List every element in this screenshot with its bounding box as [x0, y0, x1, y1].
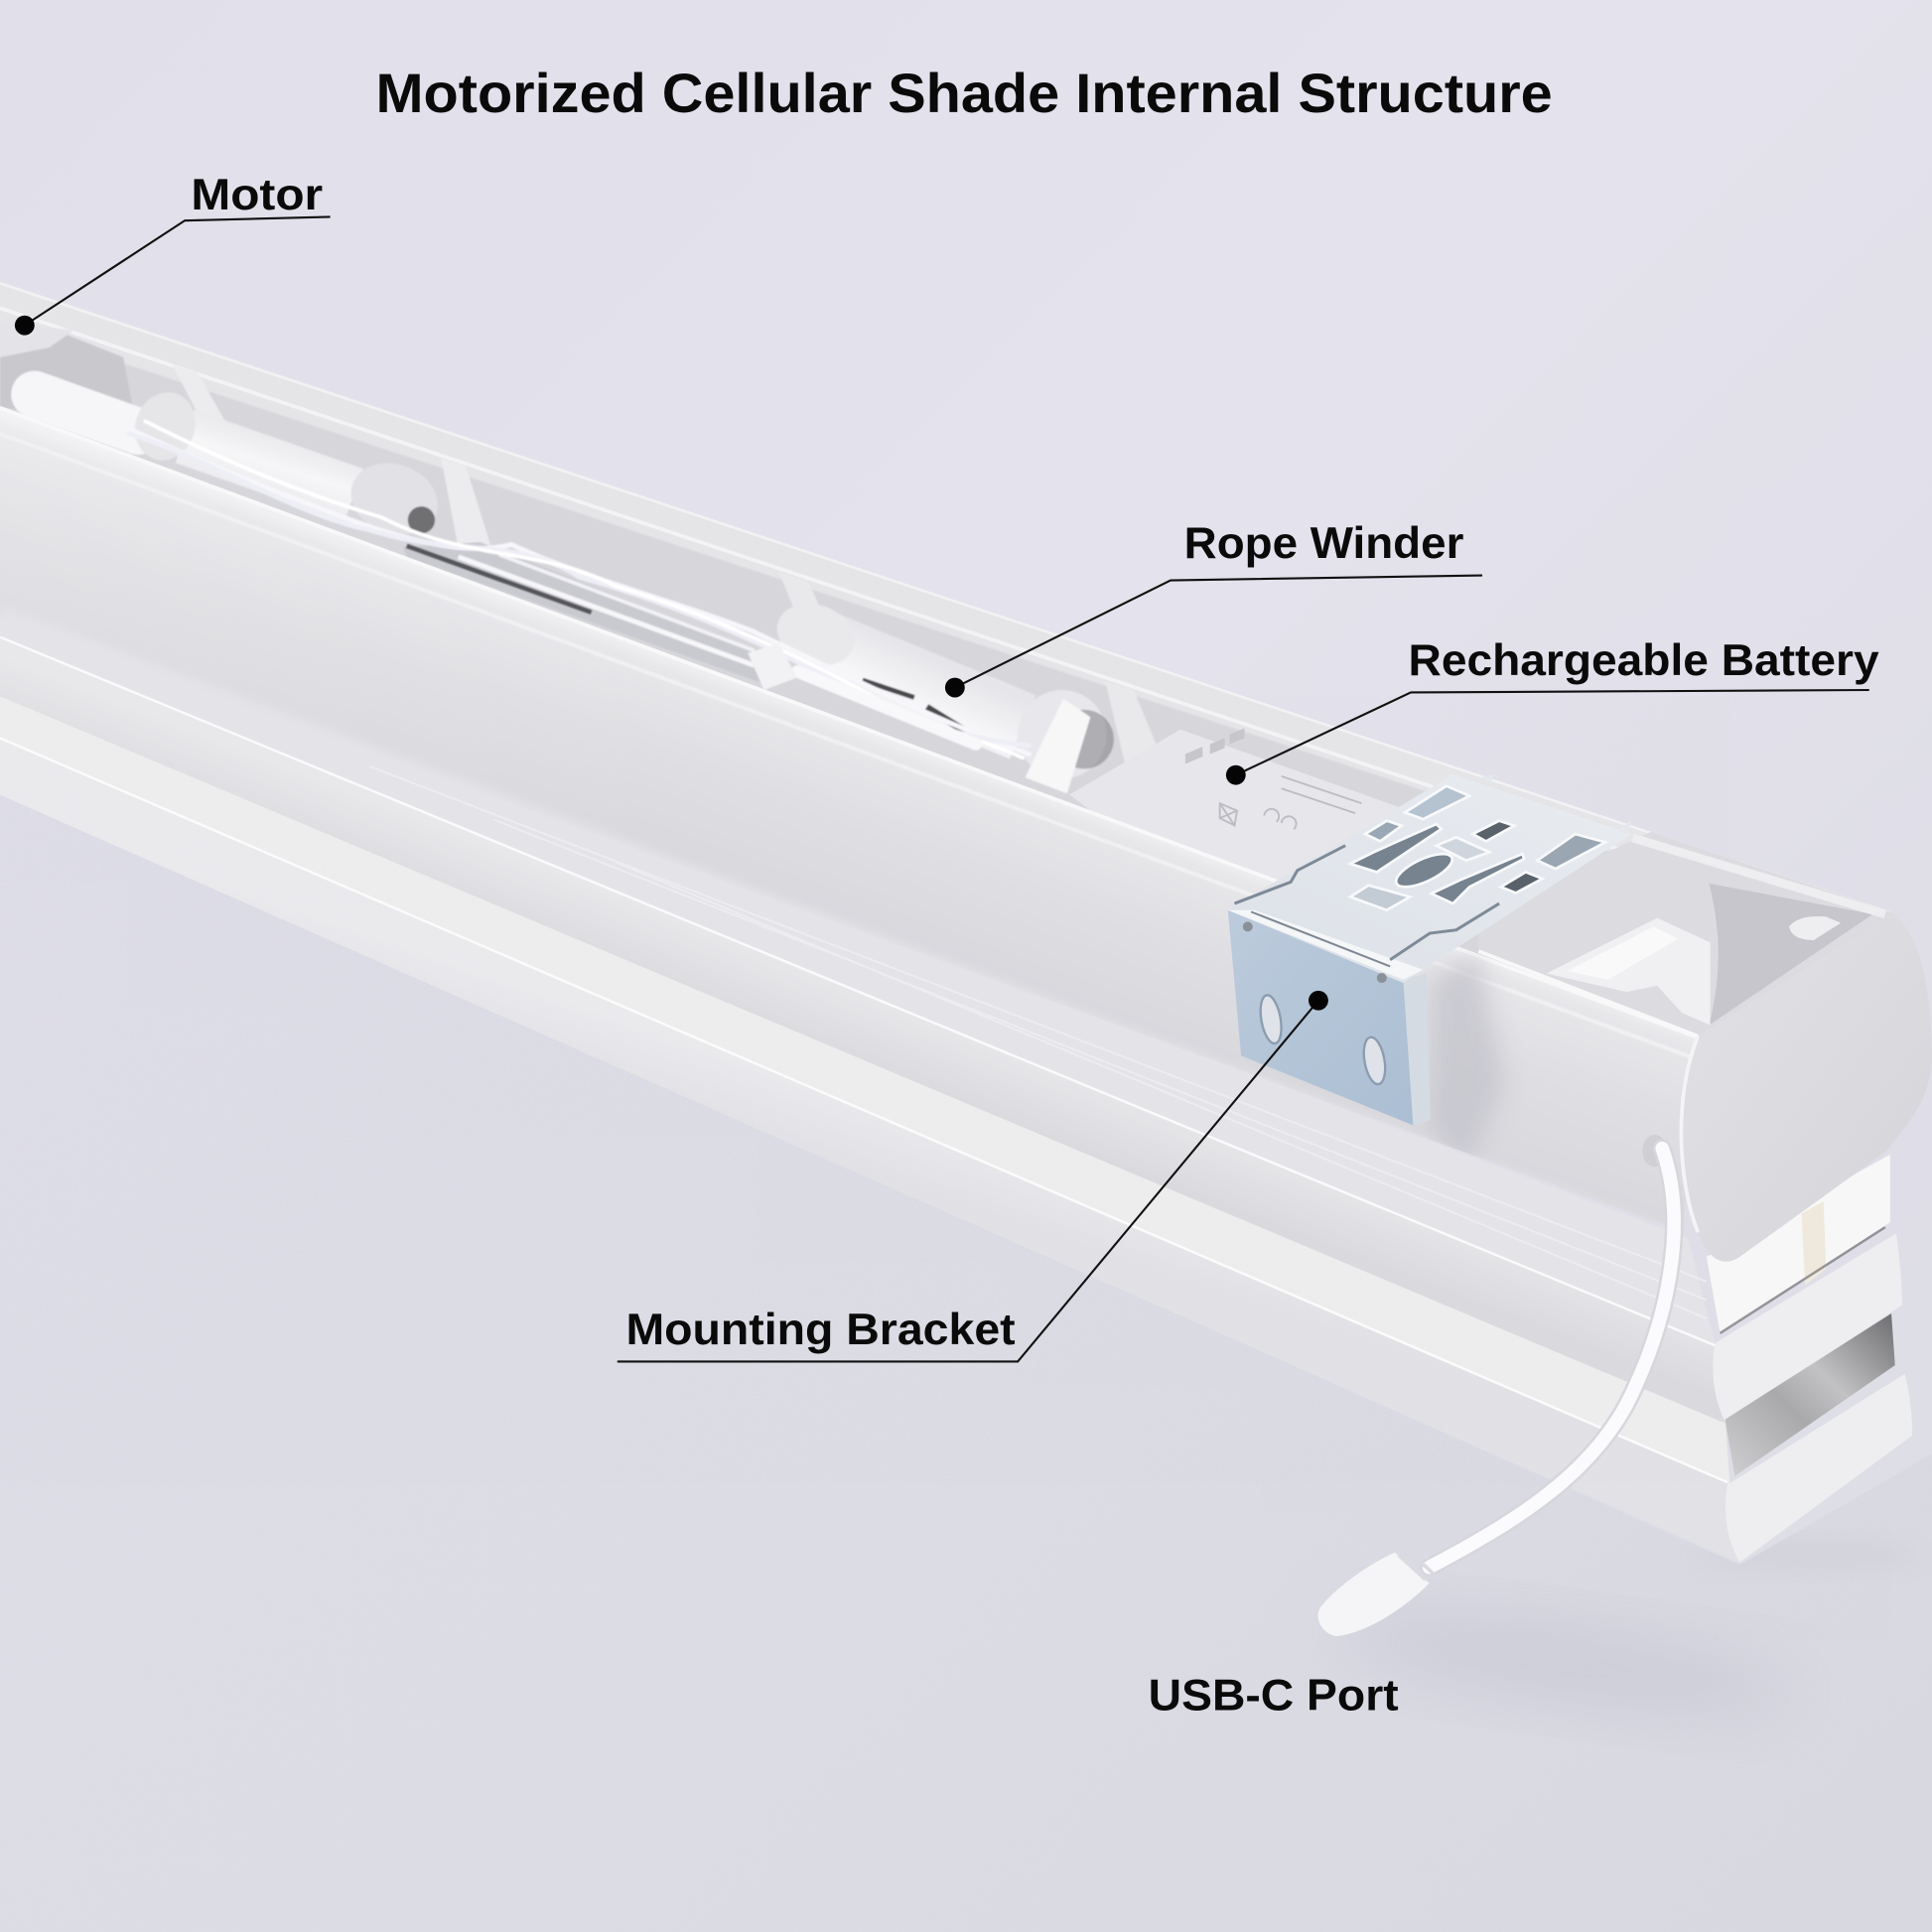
head rail end cap: [1681, 914, 1932, 1262]
silver cell edge: [1725, 1313, 1895, 1476]
callout: Rechargeable Battery: Rechargeable Battery: [1409, 636, 1879, 685]
USB-C cable: [1430, 1149, 1674, 1568]
product: motorized cellular shade: [0, 281, 1932, 1636]
wire bundle: [123, 421, 1029, 758]
callout: Rope Winder: Rope Winder: [1184, 519, 1463, 568]
head rail interior: [0, 323, 1725, 961]
bottom rail end cap: [1725, 1374, 1912, 1563]
label: USB-C Port: USB-C Port: [1149, 1672, 1399, 1721]
back lip of head rail: [0, 281, 1891, 924]
mid rail end cap: [1713, 1233, 1902, 1422]
bracket top plate: [1228, 774, 1631, 983]
rod shaft: [403, 542, 763, 684]
callout: Mounting Bracket: Mounting Bracket: [625, 1306, 1016, 1354]
USB-C connector: [1318, 1549, 1435, 1636]
soft fabric transition: [27, 625, 906, 947]
lower fabric stack: [0, 696, 1729, 1484]
mounting bracket: [1228, 774, 1631, 1126]
motor tubes: [35, 384, 448, 547]
title: Motorized Cellular Shade Internal Structure: [376, 62, 1553, 124]
callout: Rechargeable Battery: [1226, 636, 1879, 785]
bracket slots: [1350, 786, 1605, 910]
cable grommet: [1642, 1135, 1667, 1167]
right interior bay: [1478, 832, 1897, 1036]
callout: Rope Winder: [945, 519, 1482, 697]
floor surface: [0, 967, 1916, 1929]
callout: Motor: Motor: [191, 171, 323, 219]
rope winder tube: [768, 594, 1114, 793]
right-end fabric block: [1707, 1155, 1890, 1333]
callout: Motor: [15, 171, 331, 336]
bottom rail: [0, 740, 1739, 1563]
front wall of head rail: [0, 407, 1698, 1232]
bracket shadow on wall: [1430, 955, 1506, 1171]
upper fabric stack: [0, 604, 1716, 1345]
rechargeable battery box: [1069, 728, 1478, 926]
middle rail: [0, 634, 1725, 1423]
bracket front face: [1228, 910, 1413, 1125]
interior dividers: [173, 364, 1165, 788]
callout: Mounting Bracket: [618, 991, 1328, 1361]
